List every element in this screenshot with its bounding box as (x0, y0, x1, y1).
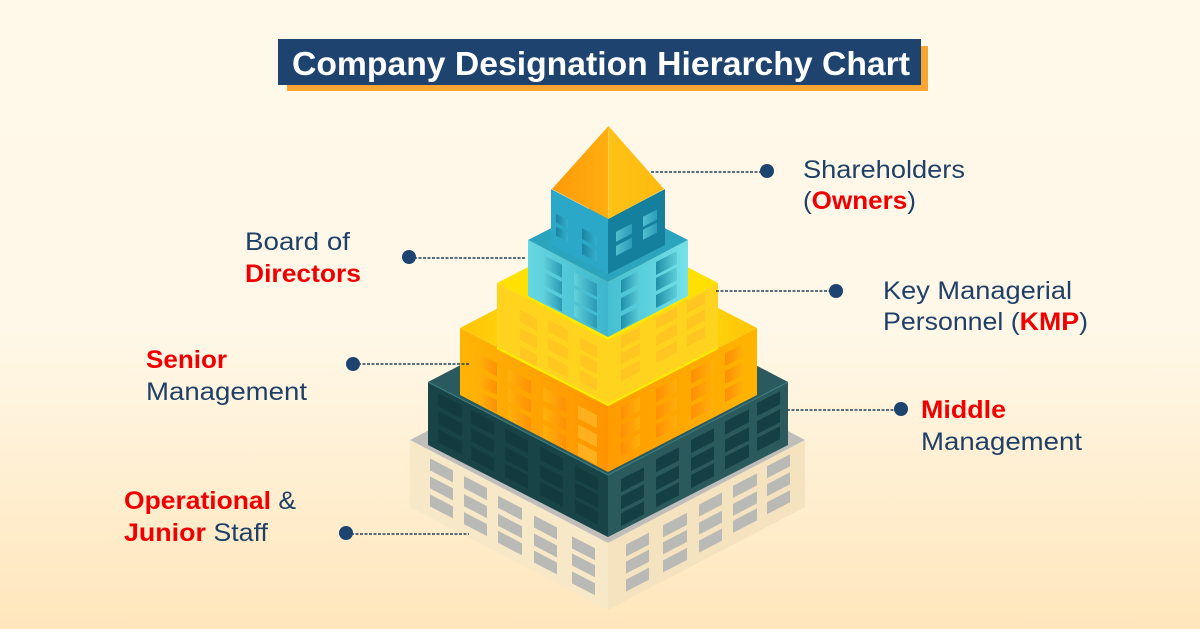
connector: board of directors (402, 250, 525, 264)
label: key managerial personnel (883, 277, 1088, 336)
label: senior management: Senior (146, 346, 227, 374)
label: senior management: Management (146, 378, 307, 406)
title text: Company Designation Hierarchy Chart (292, 45, 910, 82)
label: board of directors: Directors (245, 260, 361, 288)
title banner (278, 39, 928, 91)
label: key managerial personnel: Key Managerial (883, 277, 1072, 305)
label: board of directors (245, 228, 361, 288)
tier: operational base (410, 337, 805, 610)
tier: blue cube (551, 189, 665, 274)
connector: key managerial personnel (716, 284, 843, 298)
tier: board of directors (528, 199, 688, 337)
connector: middle management (787, 402, 908, 416)
tier: middle management (428, 288, 788, 537)
label: operational and junior staff: Operational & (124, 487, 296, 515)
connector: senior management (346, 357, 469, 371)
label: operational and junior staff (124, 487, 296, 547)
label: shareholders (803, 156, 965, 215)
connector: operational and junior staff (339, 526, 469, 540)
connector: shareholders (651, 164, 774, 178)
tier: shareholders roof (552, 126, 664, 219)
label: middle management: Middle (921, 396, 1006, 424)
label: shareholders: (Owners) (803, 187, 916, 215)
label: middle management: Management (921, 428, 1082, 456)
label: key managerial personnel: Personnel ( KMP) (883, 308, 1088, 336)
pyramid building (410, 126, 805, 610)
tier: key managerial personnel (497, 226, 718, 405)
label: shareholders: Shareholders (803, 156, 965, 184)
label: operational and junior staff: Junior Staff (124, 519, 268, 547)
label: middle management (921, 396, 1082, 456)
label: board of directors: Board of (245, 228, 350, 256)
tier: senior management (460, 251, 757, 472)
label: senior management (146, 346, 307, 406)
